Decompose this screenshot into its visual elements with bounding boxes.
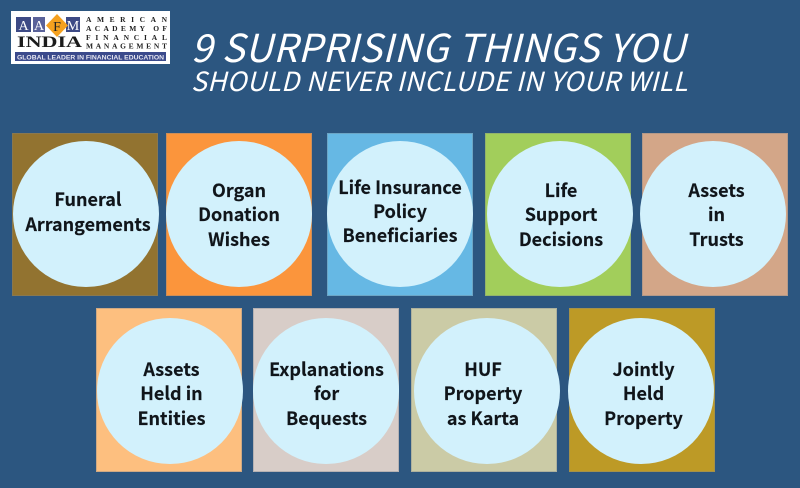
card: Assets in Trusts: Assets [688, 177, 745, 203]
card: Funeral Arrangements [12, 133, 158, 296]
card: Assets in Trusts: Trusts [689, 226, 744, 252]
logo: F [53, 20, 61, 35]
card: Organ Donation Wishes: Donation [198, 201, 280, 227]
logo: ACADEMY OF [86, 24, 167, 33]
card: Jointly Held Property: Property [604, 405, 683, 431]
title [191, 18, 689, 99]
card: Life Support Decisions [485, 133, 631, 296]
card: Organ Donation Wishes [166, 133, 312, 296]
title: SHOULD NEVER INCLUDE IN YOUR WILL [191, 60, 688, 99]
card: HUF Property as Karta: HUF [464, 356, 502, 382]
card: Assets Held in Entities: Held in [140, 380, 203, 406]
card: Assets in Trusts: in [708, 201, 725, 227]
card: Life Insurance Policy Beneficiaries: Policy [373, 198, 427, 224]
logo: A [18, 19, 29, 34]
card: Organ Donation Wishes: Wishes [208, 226, 270, 252]
card: Assets Held in Entities: Entities [137, 405, 206, 431]
card: Jointly Held Property [569, 308, 715, 472]
card: Life Support Decisions: Support [525, 201, 597, 227]
card: Explanations for Bequests [253, 308, 399, 472]
logo: A [34, 19, 45, 34]
logo: M [67, 19, 80, 34]
card: Explanations for Bequests: for [314, 380, 339, 406]
card: HUF Property as Karta: as Karta [447, 405, 519, 431]
card: Funeral Arrangements: Funeral [54, 186, 122, 212]
card: Jointly Held Property: Jointly [612, 356, 675, 382]
card: Life Insurance Policy Beneficiaries [327, 133, 473, 296]
logo: AMERICAN [86, 15, 168, 24]
card: Explanations for Bequests: Bequests [286, 405, 367, 431]
card: Life Support Decisions: Life [545, 177, 577, 203]
card: HUF Property as Karta [411, 308, 557, 472]
card: Assets Held in Entities [96, 308, 242, 472]
logo: INDIA [17, 34, 83, 51]
card: Explanations for Bequests: Explanations [269, 356, 384, 382]
logo: MANAGEMENT [86, 42, 167, 50]
card: Assets in Trusts [642, 133, 788, 296]
logo: FINANCIAL [86, 33, 167, 42]
title: 9 SURPRISING THINGS YOU [191, 18, 686, 74]
card: Jointly Held Property: Held [623, 380, 664, 406]
card: Life Insurance Policy Beneficiaries: Life Insurance [338, 174, 462, 200]
card: HUF Property as Karta: Property [444, 380, 522, 406]
logo [11, 11, 170, 64]
card: Life Insurance Policy Beneficiaries: Beneficiaries [342, 222, 458, 248]
card: Assets Held in Entities: Assets [143, 356, 200, 382]
card: Organ Donation Wishes: Organ [212, 177, 266, 203]
card: Life Support Decisions: Decisions [519, 226, 603, 252]
card: Funeral Arrangements: Arrangements [25, 210, 151, 236]
logo: GLOBAL LEADER IN FINANCIAL EDUCATION [17, 54, 164, 61]
